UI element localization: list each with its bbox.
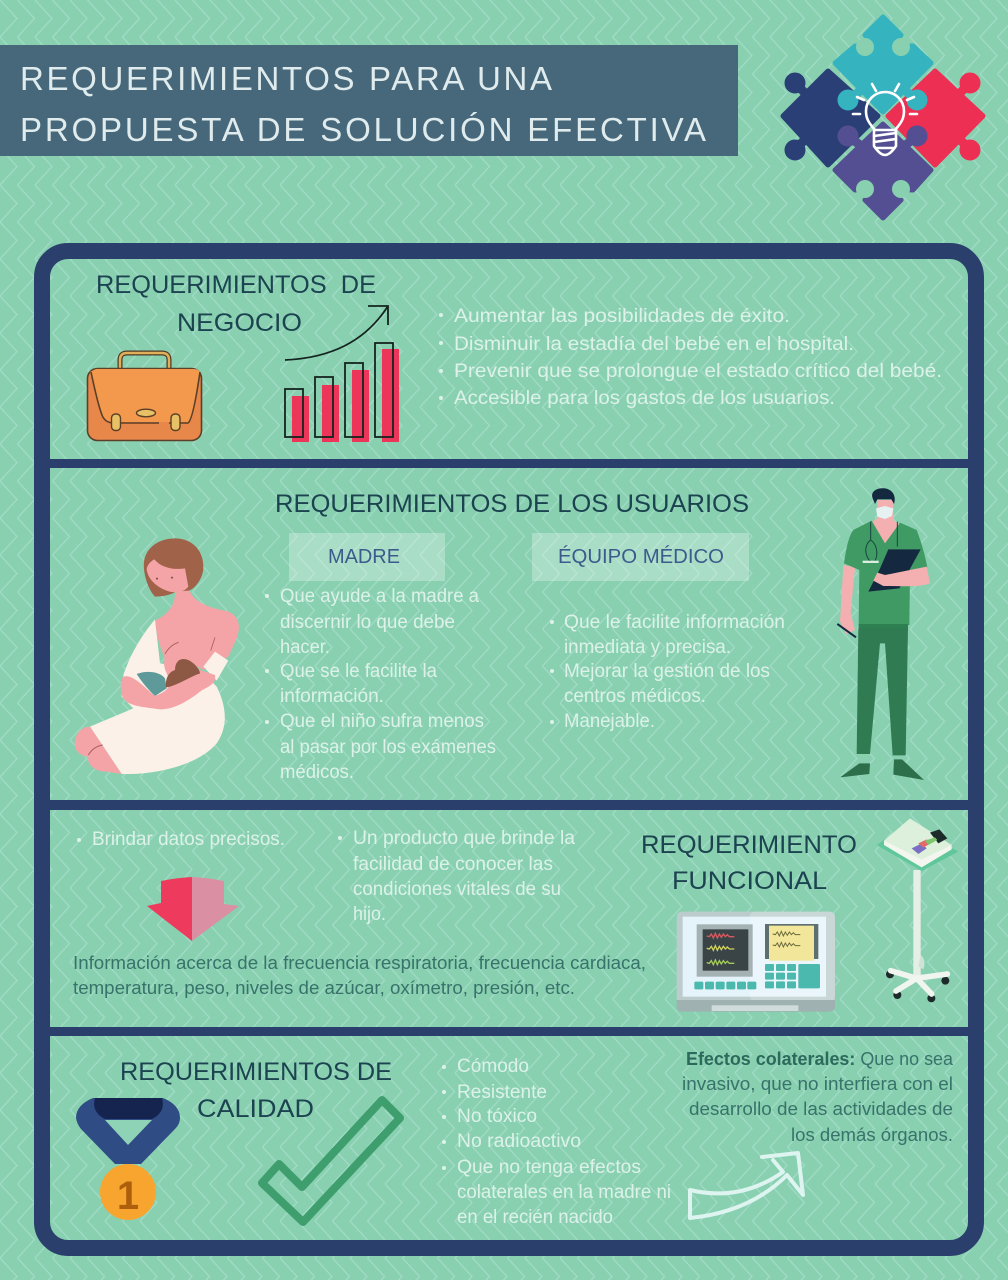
title text (20, 60, 706, 148)
text: informacion: Información acerca de la frecuencia respiratoria, frecuencia cardiaca, (73, 953, 646, 973)
outer frame with dividers (42, 251, 976, 1248)
text: calidad list: en el recién nacido (457, 1207, 613, 1228)
heading: negocio: REQUERIMIENTOS DE (96, 271, 376, 299)
text: efectos colaterales: los demás órganos. (791, 1125, 953, 1145)
text: equipo medico list: centros médicos. (564, 686, 706, 707)
chart: rising bars (285, 306, 399, 442)
illustration: mother nursing baby (75, 538, 239, 774)
heading: funcional (641, 831, 857, 895)
text: efectos colaterales: invasivo, que no interfiera con el (682, 1074, 953, 1094)
text: producto (338, 828, 575, 925)
text: madre list: médicos. (280, 762, 354, 783)
text: madre list: Que ayude a la madre a (280, 586, 479, 607)
heading: calidad (120, 1058, 392, 1123)
text: producto: hijo. (353, 904, 386, 925)
text: efectos colaterales: desarrollo de las actividades de (689, 1099, 953, 1119)
text: calidad list (442, 1056, 671, 1228)
text: negocio list: Prevenir que se prolongue el estado crítico del bebé. (454, 361, 942, 382)
text: madre list: Que se le facilite la (280, 661, 437, 682)
text: negocio list: Disminuir la estadía del bebé en el hospital. (454, 334, 854, 355)
text: efectos colaterales (682, 1049, 954, 1145)
icon: medal (76, 1098, 180, 1220)
tag: equipo medico: ÉQUIPO MÉDICO (558, 545, 724, 568)
tag: equipo medico (532, 533, 749, 581)
arrow: hand drawn white (690, 1153, 803, 1218)
panel: requerimientos de calidad (50, 1036, 968, 1240)
icon: medical monitor (677, 912, 835, 1012)
panel: requerimientos de negocio (50, 259, 968, 459)
icon: monitor on wheeled stand (877, 818, 958, 1002)
icon: briefcase (88, 353, 202, 440)
text: efectos colaterales: Efectos colaterales: Que no sea (686, 1049, 954, 1069)
heading: negocio (96, 271, 376, 337)
text: madre list: al pasar por los exámenes (280, 737, 496, 758)
text: equipo medico list (550, 612, 785, 732)
text: producto: Un producto que brinde la (353, 828, 575, 849)
text: calidad list: colaterales en la madre ni (457, 1182, 671, 1203)
text: informacion: temperatura, peso, niveles de azúcar, oxímetro, presión, etc. (73, 978, 575, 998)
text: producto: condiciones vitales de su (353, 879, 561, 900)
text: madre list (265, 586, 496, 783)
text: calidad list: No radioactivo (457, 1131, 581, 1152)
title banner (0, 45, 738, 156)
heading: funcional: FUNCIONAL (672, 867, 827, 895)
heading: calidad: REQUERIMIENTOS DE (120, 1058, 392, 1086)
text: calidad list: No tóxico (457, 1106, 537, 1127)
text: madre list: Que el niño sufra menos (280, 711, 484, 732)
text: equipo medico list: Manejable. (564, 711, 655, 732)
icon: check mark (262, 1100, 400, 1222)
text: equipo medico list: inmediata y precisa. (564, 637, 731, 658)
tag: madre: MADRE (328, 546, 400, 568)
text: madre list: hacer. (280, 637, 330, 658)
arrow: red down (147, 877, 239, 941)
tag: madre (289, 533, 445, 581)
text: informacion (73, 953, 646, 998)
text: madre list: información. (280, 686, 384, 707)
text: equipo medico list: Que le facilite información (564, 612, 785, 633)
title text: PROPUESTA DE SOLUCIÓN EFECTIVA (20, 111, 706, 148)
title text: REQUERIMIENTOS PARA UNA (20, 60, 552, 97)
text: negocio list: Aumentar las posibilidades de éxito. (454, 306, 790, 327)
text: negocio list: Accesible para los gastos de los usuarios. (454, 388, 835, 409)
heading: calidad: CALIDAD (197, 1095, 314, 1123)
heading: usuarios: REQUERIMIENTOS DE LOS USUARIOS (275, 490, 749, 518)
panel: requerimientos de los usuarios (50, 468, 968, 800)
text: madre list: discernir lo que debe (280, 612, 455, 633)
icon: medal: 1 (117, 1174, 139, 1218)
text: calidad list: Que no tenga efectos (457, 1157, 641, 1178)
heading: funcional: REQUERIMIENTO (641, 831, 857, 859)
text: calidad list: Cómodo (457, 1056, 529, 1077)
heading: negocio: NEGOCIO (177, 309, 302, 337)
illustration: doctor (837, 488, 930, 780)
text: producto: facilidad de conocer las (353, 854, 553, 875)
icon: puzzle with light bulb (783, 17, 983, 218)
text: datos precisos: Brindar datos precisos. (92, 829, 285, 850)
panel: requerimiento funcional (50, 810, 968, 1027)
text: calidad list: Resistente (457, 1082, 547, 1103)
text: equipo medico list: Mejorar la gestión de los (564, 661, 770, 682)
text: negocio list (439, 306, 942, 409)
